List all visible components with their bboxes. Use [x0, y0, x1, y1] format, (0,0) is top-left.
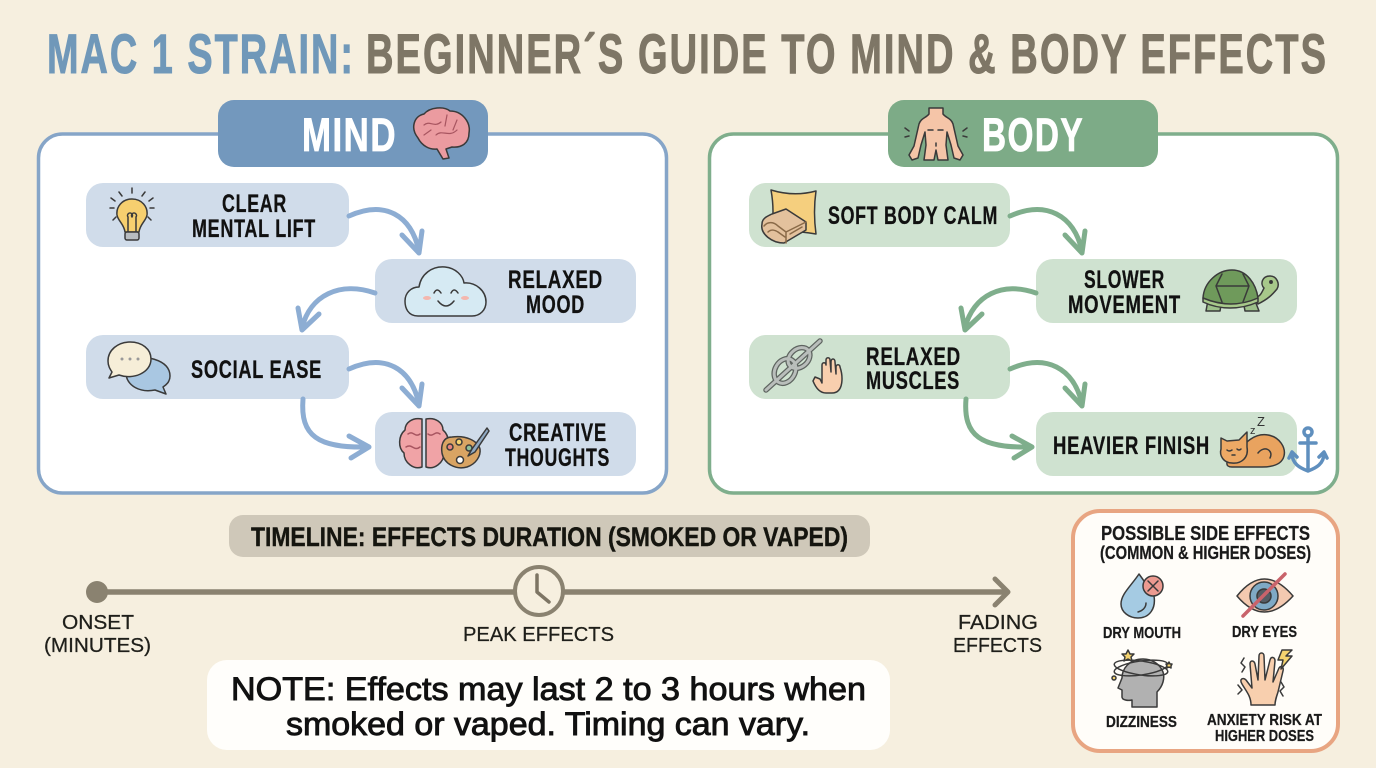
card: social ease: SOCIAL EASE	[191, 356, 322, 384]
icon: trembling hand	[1238, 650, 1292, 705]
panel: mind	[38, 100, 666, 493]
card: clear mental lift	[86, 183, 349, 247]
icon: light bulb	[110, 188, 154, 240]
icon: brain	[414, 108, 469, 159]
card: slower movement	[1036, 259, 1297, 323]
arrowhead	[995, 579, 1008, 605]
icon: pillow and blanket	[762, 190, 816, 243]
icon: smiling cloud	[405, 267, 486, 316]
card: slower movement: MOVEMENT	[1068, 291, 1181, 319]
icon: knot and open hand	[766, 341, 842, 393]
icon: turtle	[1203, 270, 1278, 311]
card: creative thoughts: CREATIVE	[509, 419, 607, 447]
arrow: relaxed muscles down to heavier finish	[966, 399, 1032, 458]
card: clear mental lift: MENTAL LIFT	[192, 215, 316, 243]
icon: dizzy head	[1112, 650, 1172, 707]
icon: water drop	[1121, 574, 1163, 618]
side effect: dizziness: DIZZINESS	[1106, 714, 1177, 731]
timeline	[44, 567, 1042, 657]
card: heavier finish: HEAVIER FINISH	[1053, 432, 1210, 460]
side effect: dry mouth	[1103, 574, 1181, 642]
card: relaxed muscles	[749, 335, 1010, 399]
card: slower movement: SLOWER	[1084, 266, 1165, 294]
icon: clock	[515, 567, 563, 615]
side effect: dry eyes	[1232, 574, 1297, 641]
fading label: FADING	[958, 612, 1038, 634]
side effects heading	[1100, 523, 1311, 563]
card: creative thoughts	[375, 412, 636, 476]
note: smoked or vaped. Timing can vary.	[286, 706, 810, 742]
arrow: soft body calm to slower movement	[1010, 210, 1085, 253]
side effects heading: POSSIBLE SIDE EFFECTS	[1101, 523, 1310, 545]
onset label: ONSET	[62, 612, 134, 634]
card: soft body calm: SOFT BODY CALM	[828, 202, 998, 230]
card: creative thoughts: THOUGHTS	[505, 444, 610, 472]
arrow: slower movement to relaxed muscles	[961, 289, 1036, 330]
arrow: relaxed muscles to heavier finish	[1010, 363, 1085, 406]
card: relaxed muscles: RELAXED	[866, 343, 961, 371]
onset dot	[86, 581, 108, 603]
card: heavier finish: z	[1250, 425, 1256, 437]
side effect: dry mouth: DRY MOUTH	[1103, 625, 1181, 642]
heading: mind	[218, 100, 488, 167]
peak label: PEAK EFFECTS	[463, 624, 614, 646]
side effect: anxiety risk: ANXIETY RISK AT	[1207, 712, 1322, 729]
card: soft body calm	[749, 183, 1010, 247]
arrow: social ease to creative thoughts	[349, 363, 422, 406]
icon: body figure	[905, 108, 967, 160]
icon: sleeping cat	[1221, 432, 1284, 467]
panel: body	[710, 100, 1338, 493]
card: relaxed mood: RELAXED	[508, 266, 603, 294]
timeline heading: TIMELINE: EFFECTS DURATION (SMOKED OR VAPED)	[251, 522, 848, 552]
card: clear mental lift: CLEAR	[222, 190, 287, 218]
side effect: anxiety risk	[1207, 650, 1322, 745]
heading: mind: MIND	[302, 108, 397, 161]
side effect: dry eyes: DRY EYES	[1232, 624, 1297, 641]
heading: body: BODY	[982, 108, 1084, 161]
side effect: dizziness	[1106, 650, 1177, 731]
card: social ease	[86, 335, 349, 399]
side effect: anxiety risk: HIGHER DOSES	[1215, 728, 1314, 745]
arrow: clear mental lift to relaxed mood	[349, 210, 422, 253]
card: heavier finish: Z	[1257, 414, 1265, 429]
icon: anchor	[1289, 428, 1327, 471]
card: relaxed muscles: MUSCLES	[866, 367, 960, 395]
note: NOTE: Effects may last 2 to 3 hours when	[231, 671, 866, 707]
panel: side effects	[1073, 511, 1338, 751]
note	[207, 660, 890, 750]
icon: chat bubbles	[108, 342, 170, 394]
card: heavier finish	[1036, 412, 1297, 476]
fading label	[953, 612, 1042, 657]
onset label	[44, 612, 151, 657]
heading: body	[888, 100, 1158, 167]
timeline heading	[229, 515, 870, 557]
card: relaxed mood: MOOD	[526, 291, 585, 319]
title: MAC 1 STRAIN:	[47, 22, 355, 85]
arrow: relaxed mood to social ease	[298, 289, 375, 330]
icon: crossed eye	[1237, 574, 1293, 616]
icon: brain and palette	[400, 419, 489, 468]
card: relaxed mood	[375, 259, 636, 323]
side effects heading: (COMMON & HIGHER DOSES)	[1100, 543, 1311, 563]
fading label: EFFECTS	[953, 635, 1042, 657]
onset label: (MINUTES)	[44, 635, 151, 657]
arrow: social ease down to creative thoughts	[303, 399, 369, 458]
